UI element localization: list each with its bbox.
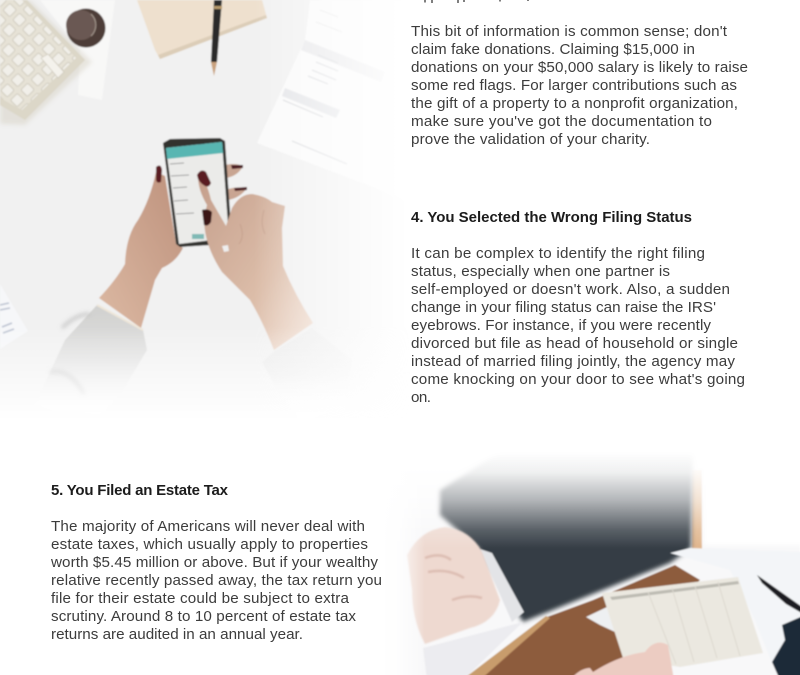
icon: white plate	[586, 607, 615, 632]
text block: filing status: It can be complex to identify the right filing	[411, 245, 705, 262]
text block: estate tax: estate taxes, which usually apply to properties	[51, 536, 368, 553]
heading: section 4: 4. You Selected the Wrong Filing Status	[411, 209, 692, 226]
icon: left paper	[0, 302, 14, 334]
text block: estate tax: worth $5.45 million or above. But if your wealthy	[50, 554, 378, 571]
text block: estate tax: The majority of Americans will never deal with	[51, 518, 365, 535]
text block: filing status: status, especially when one partner is	[411, 263, 670, 280]
desk surface	[0, 0, 320, 368]
icon: suit	[440, 445, 693, 622]
text block: filing status: on.	[411, 389, 431, 406]
icon: receipt paper	[40, 0, 115, 100]
icon: background orange strip	[692, 470, 702, 552]
text block: filing status: come knocking on your door to see what's going	[411, 371, 745, 388]
icon: paperweight	[66, 8, 106, 48]
icon: left thumb nail	[156, 166, 162, 183]
text block: charitable donations: claim fake donations. Claiming $15,000 in	[411, 41, 695, 58]
text block: charitable donations: donations on your $50,000 salary is likely to raise	[411, 59, 748, 76]
text block: charitable donations: make sure you've got the documentation to	[411, 113, 712, 130]
icon: right sleeve	[262, 328, 352, 420]
text block: charitable donations: the gift of a property to a nonprofit organization,	[411, 95, 738, 112]
icon: shirt cuff	[480, 549, 524, 622]
text block: estate tax: relative recently passed away, the tax return you	[51, 572, 382, 589]
text block: filing status: eyebrows. For instance, if you were recently	[411, 317, 711, 334]
icon: left sleeve	[50, 304, 146, 388]
text block: charitable donations: prove the validation of your charity.	[411, 131, 650, 148]
icon: held card	[602, 577, 763, 667]
icon: beige notebook	[137, 0, 267, 59]
icon: brown table	[478, 565, 700, 675]
icon: dark pen	[757, 575, 800, 615]
text block: estate tax: scrutiny. Around 8 to 10 percent of estate tax	[51, 608, 356, 625]
icon: paper under hand	[423, 622, 523, 675]
text block: estate tax: returns are audited in an annual year.	[51, 626, 303, 643]
text block: estate tax	[50, 518, 382, 643]
text block: charitable donations: This bit of information is common sense; don't	[411, 23, 728, 40]
icon: clasped hand	[407, 527, 500, 644]
photo: suited man and paperwork	[406, 462, 800, 675]
text block: charitable donations: some red flags. For larger contributions such as	[411, 77, 737, 94]
soft edge right of orange strip	[704, 440, 800, 545]
text block: estate tax: file for their estate could be subject to extra	[51, 590, 350, 607]
icon: calculator	[0, 0, 92, 125]
icon: dark sleeve	[772, 615, 800, 675]
heading: section 5: 5. You Filed an Estate Tax	[51, 482, 229, 499]
icon: papers at right	[670, 547, 800, 614]
icon: document	[258, 54, 336, 147]
text block: filing status: instead of married filing jointly, the agency may	[411, 353, 735, 370]
white desk surface	[448, 520, 780, 675]
icon: right hand	[197, 171, 313, 350]
photo left fade	[380, 445, 425, 675]
photo: desk with phone and hands	[0, 0, 352, 394]
text block: charitable donations	[411, 23, 748, 148]
icon: pen	[211, 0, 222, 76]
text block: filing status: self-employed or doesn't work. Also, a sudden	[411, 281, 730, 298]
icon: phone	[163, 138, 232, 247]
icon: bottom hand	[570, 643, 674, 675]
icon: wooden edge	[462, 616, 550, 675]
clipped heading remnant	[425, 0, 528, 3]
text block: filing status: change in your filing status can raise the IRS'	[411, 299, 716, 316]
text block: filing status	[411, 245, 745, 406]
text block: filing status: divorced but file as head of household or single	[411, 335, 738, 352]
icon: left hand	[99, 164, 247, 328]
